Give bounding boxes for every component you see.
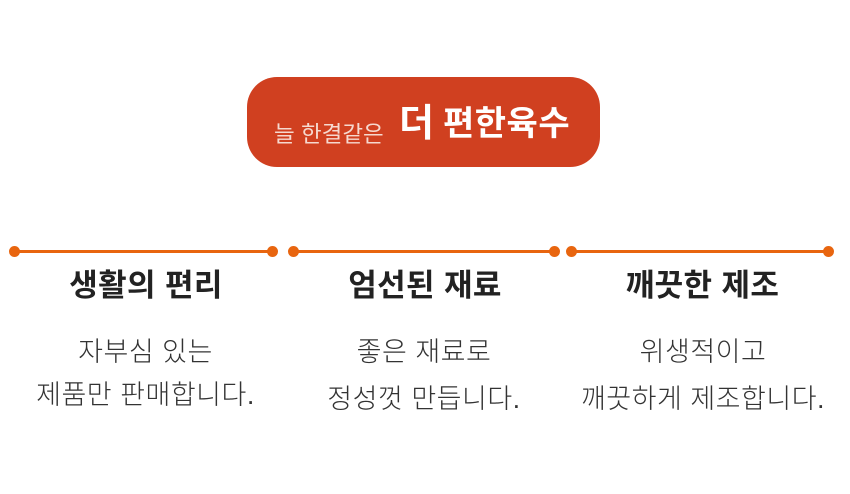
heading 1: 생활의 편리 — [69, 268, 223, 303]
connector dot 2 left — [288, 246, 298, 257]
panel: convenience — [9, 246, 278, 410]
body text 2 line 2: 정성껏 만듭니다. — [327, 384, 521, 414]
banner tagline: 늘 한결같은 — [274, 122, 384, 147]
body text 1 line 2: 제품만 판매합니다. — [36, 380, 255, 410]
body text 1 line 1: 자부심 있는 — [78, 337, 213, 367]
connector dot 1 right — [267, 246, 278, 257]
panel: ingredients — [288, 246, 560, 414]
connector line 1 — [14, 250, 272, 253]
heading 2: 엄선된 재료 — [348, 268, 502, 303]
connector dot 3 left — [566, 246, 576, 257]
body text 2 line 1: 좋은 재료로 — [357, 337, 491, 367]
banner brand name: 편한육수 — [443, 105, 570, 143]
heading 3: 깨끗한 제조 — [626, 268, 779, 303]
banner large character: 더 — [399, 103, 434, 145]
connector dot 1 left — [8, 246, 20, 257]
connector line 3 — [571, 250, 828, 253]
connector dot 3 right — [822, 246, 834, 257]
connector dot 2 right — [549, 246, 560, 257]
connector line 2 — [293, 250, 554, 253]
body text 3 line 1: 위생적이고 — [640, 337, 766, 367]
banner — [247, 77, 600, 167]
panel: manufacturing — [566, 246, 834, 414]
body text 3 line 2: 깨끗하게 제조합니다. — [581, 384, 825, 414]
